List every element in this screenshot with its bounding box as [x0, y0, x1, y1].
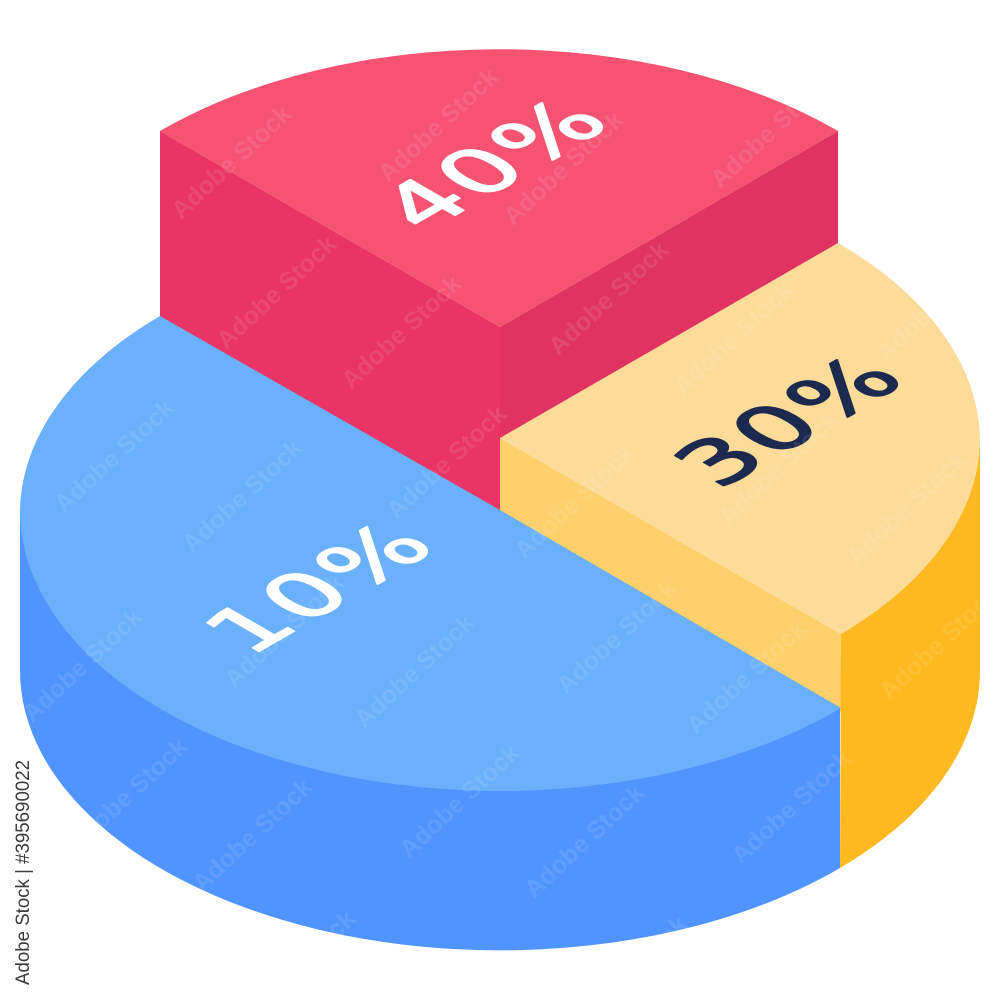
label: 40%: 40%	[357, 84, 634, 243]
watermark pattern: Adobe Stock	[211, 230, 342, 354]
watermark pattern: Adobe Stock	[373, 63, 504, 187]
red slice top	[160, 49, 838, 327]
watermark pattern: Adobe Stock	[871, 242, 1000, 366]
blue slice outer side	[20, 510, 840, 950]
yellow slice top	[500, 243, 980, 634]
watermark pattern: Adobe Stock	[381, 400, 512, 524]
label: 10%: 10%	[182, 508, 459, 667]
blue slice top	[20, 316, 841, 791]
watermark pattern: Adobe Stock	[713, 406, 844, 530]
yellow slice outer side	[840, 440, 980, 868]
yellow slice inner side	[500, 438, 841, 712]
watermark pattern: Adobe Stock	[17, 603, 148, 727]
red slice right side	[500, 131, 838, 438]
watermark pattern: Adobe Stock	[62, 733, 193, 857]
watermark pattern: Adobe Stock	[41, 57, 172, 181]
image id caption: Adobe Stock | #395690022	[13, 760, 34, 985]
watermark pattern: Adobe Stock	[519, 779, 650, 903]
label: 30%: 30%	[652, 341, 929, 500]
watermark pattern: Adobe Stock	[851, 785, 982, 909]
slice: yellow 30%	[500, 243, 980, 868]
watermark pattern: Adobe Stock	[336, 270, 467, 394]
watermark pattern: Adobe Stock	[187, 773, 318, 897]
watermark pattern: Adobe Stock	[705, 69, 836, 193]
watermark pattern: Adobe Stock	[219, 569, 350, 693]
watermark pattern: Adobe Stock	[177, 434, 308, 558]
watermark pattern: Adobe Stock	[726, 745, 857, 869]
slice: blue 10%	[20, 316, 841, 950]
watermark pattern: Adobe Stock	[668, 276, 799, 400]
watermark pattern: Adobe Stock	[4, 264, 135, 388]
watermark pattern: Stock	[624, 911, 693, 978]
slice: red 40%	[160, 49, 838, 514]
watermark pattern: Adobe Stock	[166, 100, 297, 224]
watermark pattern: Adobe Stock	[551, 575, 682, 699]
watermark pattern: Adobe Stock	[349, 609, 480, 733]
watermark pattern: Adobe Stock	[498, 106, 629, 230]
watermark pattern: Stock	[292, 905, 361, 972]
watermark pattern: Adobe Stock	[509, 440, 640, 564]
watermark pattern: Adobe Stock	[681, 615, 812, 739]
red slice left side	[160, 131, 500, 514]
watermark pattern: Adobe Stock	[394, 739, 525, 863]
watermark pattern: Adobe Stock	[49, 394, 180, 518]
watermark pattern: Adobe Stock	[830, 112, 961, 236]
watermark pattern: Adobe Stock	[841, 446, 972, 570]
watermark pattern: Adobe Stock	[543, 236, 674, 360]
